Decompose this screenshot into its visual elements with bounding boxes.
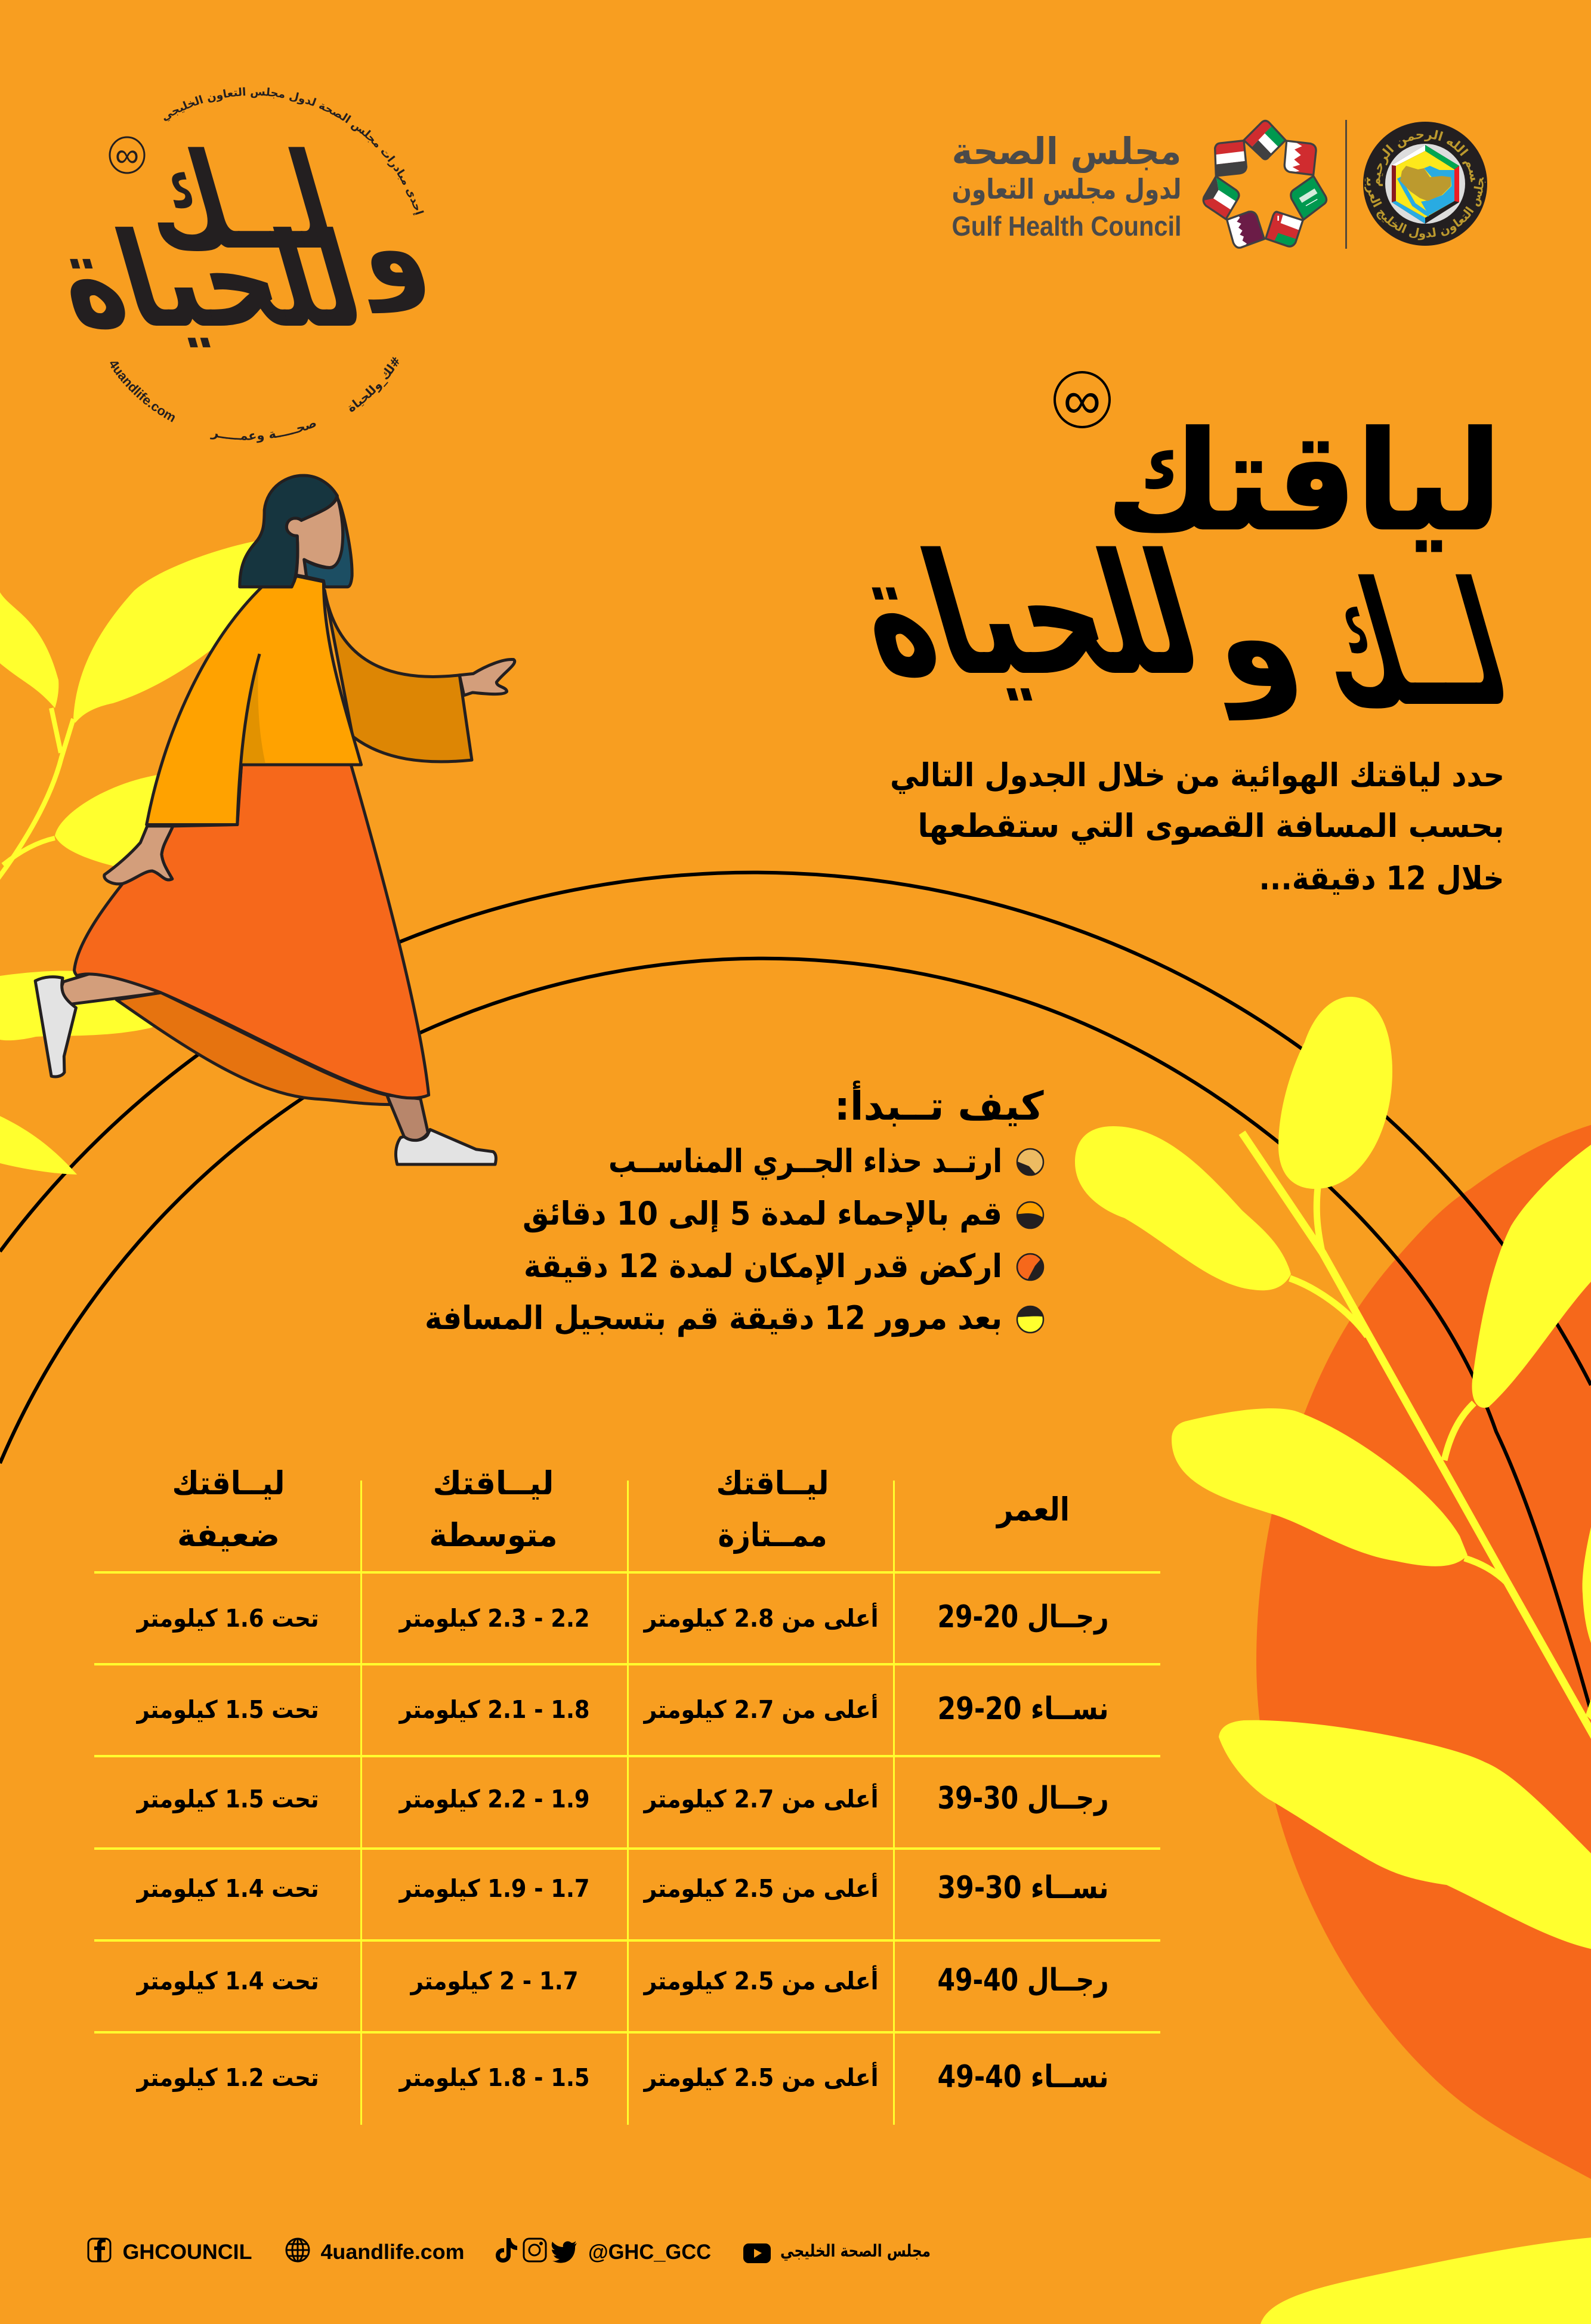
text: facebook handle: GHCOUNCIL [123, 2240, 252, 2264]
row 1: أعلى من 2.8 كيلومتر [643, 1602, 878, 1633]
table header: متوسطة [430, 1516, 557, 1554]
back shoe [35, 977, 76, 1077]
bullet 3 [1017, 1253, 1044, 1281]
row 1: 2.2 - 2.3 كيلومتر [398, 1604, 589, 1633]
infinity badge [110, 136, 144, 174]
jacket [147, 576, 362, 825]
jacket shade [242, 656, 265, 764]
Gulf Health Council logo [952, 119, 1487, 249]
step 2: قم بالإحماء لمدة 5 إلى 10 دقائق [523, 1195, 1002, 1232]
table header: ممــتازة [718, 1516, 827, 1554]
how to start [425, 1080, 1046, 1337]
title word: fitness: لياقتك [1107, 402, 1502, 561]
far hand [459, 660, 515, 696]
infinity badge: ∞ [115, 136, 139, 174]
row 4: 1.7 - 1.9 كيلومتر [398, 1874, 589, 1903]
step 1: ارتــد حذاء الجــري المناســب [608, 1142, 1002, 1180]
front leg [387, 1095, 428, 1141]
orange blob [1256, 1123, 1591, 2183]
row 1: تحت 1.6 كيلومتر [136, 1604, 319, 1633]
skirt [75, 765, 429, 1098]
row 3: 1.9 - 2.2 كيلومتر [398, 1785, 589, 1813]
bullet 1 [1017, 1148, 1044, 1176]
council name arabic: مجلس الصحة [952, 129, 1181, 173]
row 2: 1.8 - 2.1 كيلومتر [398, 1695, 589, 1724]
logo word: lak: لــك [123, 125, 350, 279]
icon: globe [286, 2239, 309, 2261]
intro paragraph [890, 756, 1505, 897]
ring text url: 4uandlife.com [110, 361, 175, 422]
icon: instagram [524, 2239, 546, 2261]
text: youtube channel: مجلس الصحة الخليجي [780, 2241, 931, 2261]
row 5: أعلى من 2.5 كيلومتر [643, 1965, 878, 1995]
row 4: تحت 1.4 كيلومتر [136, 1874, 319, 1903]
row 6: 1.5 - 1.8 كيلومتر [398, 2063, 589, 2092]
row 4: أعلى من 2.5 كيلومتر [643, 1872, 878, 1903]
row 1 [136, 1599, 1108, 1635]
bullet 2 [1017, 1201, 1044, 1229]
row 1: رجــال 20-29 [938, 1599, 1108, 1635]
main title [836, 370, 1528, 744]
row 4: نســاء 30-39 [938, 1870, 1108, 1906]
logo word: lil hayat: للحياة [39, 205, 379, 357]
ring text hashtag: #لك_وللحياة [348, 357, 399, 412]
row 6: تحت 1.2 كيلومتر [136, 2063, 319, 2092]
flag: Kuwait [1201, 175, 1241, 221]
infinity badge: ∞ [1064, 370, 1101, 429]
step 3: اركض قدر الإمكان لمدة 12 دقيقة [524, 1247, 1002, 1285]
arcs [0, 873, 1591, 1718]
title word: waw: و [1182, 556, 1317, 721]
back leg [61, 974, 161, 1004]
step 4: بعد مرور 12 دقيقة قم بتسجيل المسافة [425, 1299, 1002, 1337]
woman illustration [35, 475, 515, 1164]
icon: twitter [552, 2241, 577, 2263]
intro paragraph: بحسب المسافة القصوى التي ستقطعها [917, 807, 1505, 845]
table header: ضعيفة [177, 1516, 280, 1554]
campaign logo [39, 87, 441, 443]
intro paragraph: حدد لياقتك الهوائية من خلال الجدول التالي [890, 756, 1505, 794]
flag: Oman [1265, 211, 1304, 248]
row 5: تحت 1.4 كيلومتر [136, 1967, 319, 1995]
table header: ليــاقتك [433, 1464, 554, 1502]
council name second line: لدول مجلس التعاون [952, 173, 1181, 205]
far sleeve [325, 590, 472, 762]
row 5 [136, 1963, 1108, 1998]
row 3: تحت 1.5 كيلومتر [136, 1785, 319, 1813]
ring text tagline: صحـــــة وعمـــــر [210, 422, 316, 443]
under skirt [116, 993, 390, 1105]
flag: Saudi Arabia [1291, 176, 1326, 220]
row 2: تحت 1.5 كيلومتر [136, 1695, 319, 1724]
row 3: أعلى من 2.7 كيلومتر [643, 1783, 878, 1813]
flag: Qatar [1225, 210, 1266, 249]
logo word: waw: و [335, 184, 441, 314]
text: social handle: @GHC_GCC [588, 2240, 711, 2264]
flag: Bahrain [1283, 139, 1318, 177]
table header: ليــاقتك [172, 1464, 285, 1502]
how to start heading: كيف تــبدأ: [834, 1080, 1044, 1129]
intro paragraph: خلال 12 دقيقة... [1259, 860, 1505, 897]
row 6 [136, 2059, 1108, 2095]
row 4 [136, 1870, 1108, 1906]
table header: ليــاقتك [716, 1464, 829, 1502]
title word: lil hayat: للحياة [836, 519, 1220, 713]
row 2: نســاء 20-29 [938, 1691, 1108, 1727]
row 5: رجــال 40-49 [938, 1963, 1108, 1998]
table header [172, 1464, 1070, 1554]
council name english: Gulf Health Council [952, 211, 1181, 242]
front shoe [396, 1130, 496, 1164]
logo divider [1345, 120, 1347, 249]
jacket slit [237, 654, 259, 825]
row 5: 1.7 - 2 كيلومتر [410, 1967, 579, 1995]
GCC seal [1363, 122, 1487, 246]
flag: Yemen [1213, 139, 1249, 177]
right plant [1075, 997, 1591, 2324]
row 2: أعلى من 2.7 كيلومتر [643, 1693, 878, 1724]
near hand [104, 826, 173, 884]
row 2 [136, 1691, 1108, 1727]
fitness table [94, 1464, 1160, 2125]
icon: youtube [743, 2243, 771, 2263]
table grid [94, 1481, 1160, 2125]
row 6: نســاء 40-49 [938, 2059, 1108, 2095]
infinity badge [1055, 370, 1110, 429]
left plant [0, 540, 268, 1175]
row 6: أعلى من 2.5 كيلومتر [643, 2062, 878, 2092]
text: website: 4uandlife.com [321, 2240, 464, 2264]
back hair [304, 498, 352, 587]
row 3 [136, 1781, 1108, 1816]
icon: tiktok [496, 2238, 517, 2263]
table header: العمر [995, 1491, 1070, 1528]
footer [88, 2238, 931, 2264]
ring text top: إحدى مبادرات مجلس الصحة لدول مجلس التعاون الخليجي [163, 87, 424, 216]
flag: UAE [1243, 119, 1286, 160]
front hair [240, 475, 337, 587]
face [286, 497, 343, 577]
row 3: رجــال 30-39 [938, 1781, 1108, 1816]
flag star [1201, 118, 1326, 249]
icon: facebook [88, 2239, 110, 2261]
bullet 4 [1017, 1305, 1044, 1334]
